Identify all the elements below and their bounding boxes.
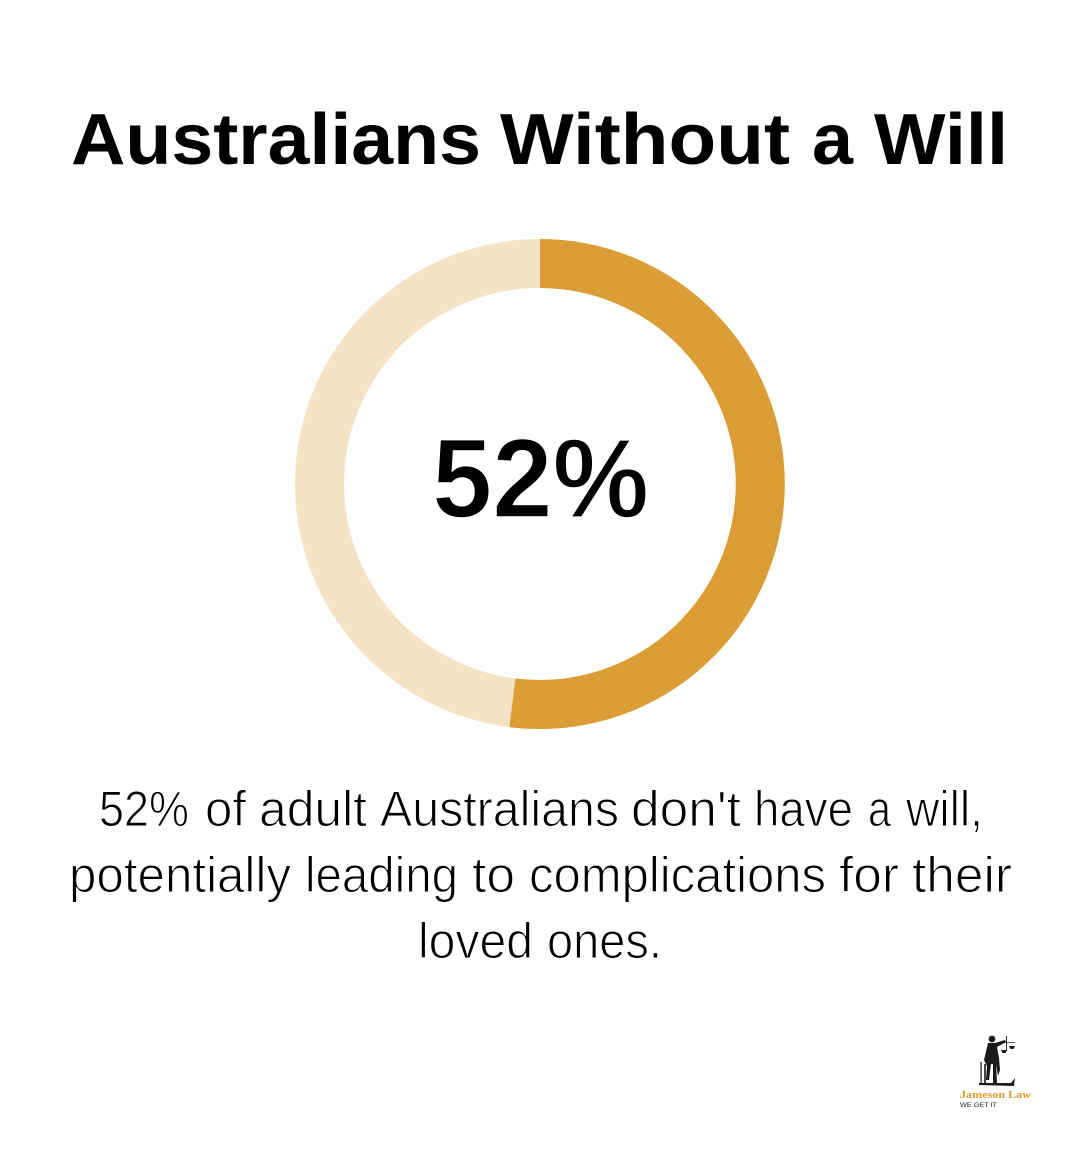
description text: loved xyxy=(418,913,533,969)
description text xyxy=(69,781,1012,969)
logo tagline: WE GET IT xyxy=(960,1102,997,1109)
description text: potentially xyxy=(69,847,291,903)
title: Will xyxy=(874,100,1008,180)
description text: have xyxy=(754,781,853,837)
title: a xyxy=(812,100,854,180)
description text: leading xyxy=(305,847,458,903)
logo: Jameson Law xyxy=(960,1036,1031,1109)
description text: Australians xyxy=(380,781,619,837)
description text: of xyxy=(205,781,246,837)
icon: lady justice xyxy=(979,1036,1015,1086)
description text: ones. xyxy=(547,913,662,969)
description text: to xyxy=(472,847,515,903)
description text: a xyxy=(868,781,891,837)
ring: remaining 48% xyxy=(320,264,760,704)
description text: 52% xyxy=(99,781,189,837)
description text: their xyxy=(912,847,1012,903)
description text: will, xyxy=(905,781,983,837)
description text: complications xyxy=(529,847,826,903)
title: Australians xyxy=(71,100,481,180)
donut chart: 52% xyxy=(320,264,760,704)
logo name: Jameson Law xyxy=(960,1089,1031,1101)
title: Without xyxy=(500,100,790,180)
ring: 52% segment xyxy=(512,264,760,704)
description text: for xyxy=(839,847,899,903)
center value: 52% xyxy=(432,416,649,541)
title xyxy=(71,100,1008,180)
description text: don't xyxy=(631,781,741,837)
description text: adult xyxy=(259,781,367,837)
